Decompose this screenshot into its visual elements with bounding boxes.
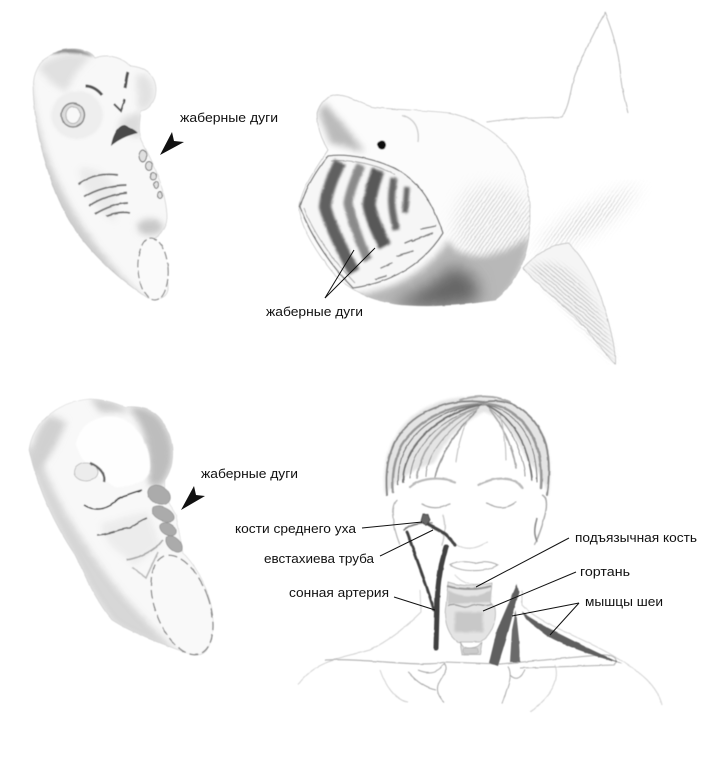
illustration: first embryo: [24, 49, 170, 305]
embryo eye: [51, 91, 103, 139]
shark eye: [378, 140, 386, 150]
neck and shoulders outline: [298, 590, 662, 712]
carotid artery and jugular: [404, 523, 446, 648]
brows, eyes, nose, lips: [410, 479, 522, 584]
embryo eye: [74, 463, 104, 482]
labels: human anatomy: подъязычная кость: [575, 530, 697, 545]
sternum: [408, 663, 525, 704]
arrow: second embryo: [181, 486, 205, 510]
callout lines: gill arches, shark: [325, 248, 375, 298]
labels: human anatomy: евстахиева труба: [264, 551, 375, 566]
label: gill arches, first embryo: жаберные дуги: [180, 110, 278, 125]
callout lines: human: [362, 522, 579, 635]
dashed cut section: [139, 547, 225, 663]
gill arches: [325, 162, 407, 272]
labels: human anatomy: гортань: [580, 564, 630, 579]
dashed ellipse cut: [136, 237, 170, 301]
illustration: second embryo: [28, 398, 214, 656]
arrow: first embryo: [160, 132, 184, 155]
illustration: basking shark: [299, 13, 660, 365]
label: gill arches, second embryo: жаберные дуги: [201, 466, 298, 481]
labels: human anatomy: [235, 521, 697, 609]
illustration: human head and neck: [298, 396, 662, 712]
pectoral fin: [523, 243, 615, 364]
neck muscles: [489, 584, 622, 666]
larynx and hyoid: [445, 582, 495, 655]
embryo pharyngeal bumps: [139, 150, 162, 198]
dorsal fin: [562, 13, 628, 117]
embryo brain bulge: [76, 417, 150, 488]
label: gill arches, shark: жаберные дуги: [266, 304, 363, 319]
hair mass: [384, 397, 550, 497]
labels: human anatomy: мышцы шеи: [585, 594, 663, 609]
embryo folds: [84, 490, 163, 578]
labels: human anatomy: кости среднего уха: [235, 521, 357, 536]
clavicle: [325, 655, 616, 668]
labels: human anatomy: сонная артерия: [289, 585, 389, 600]
Eustachian tube: [424, 522, 455, 545]
middle ear bones: [421, 514, 430, 526]
shark body: [487, 117, 562, 122]
embryo branchial bulges: [144, 481, 185, 555]
embryo gill folds: [79, 174, 130, 216]
hair strands: [386, 396, 549, 495]
ears: [393, 500, 400, 545]
head: [299, 95, 530, 306]
gill rakers: [376, 226, 436, 279]
open mouth: [300, 155, 443, 288]
